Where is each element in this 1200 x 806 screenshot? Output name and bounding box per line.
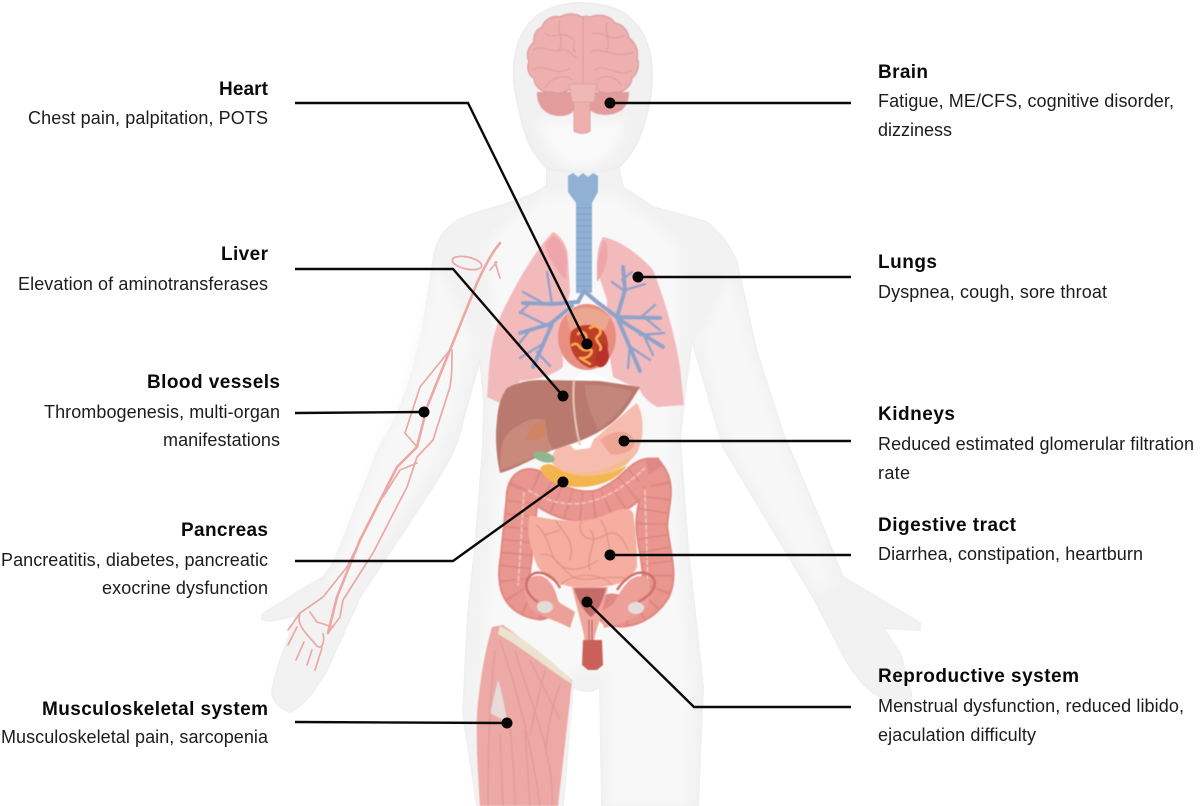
label: blood vessels: Blood vessels bbox=[147, 372, 280, 393]
label: liver: Elevation of aminotransferases bbox=[18, 274, 268, 294]
label: pancreas: exocrine dysfunction bbox=[102, 578, 268, 598]
label: lungs: Lungs bbox=[878, 252, 937, 273]
label: reproductive system bbox=[878, 666, 1184, 745]
label: kidneys: rate bbox=[878, 463, 910, 483]
label: heart bbox=[28, 79, 269, 128]
label: brain: Brain bbox=[878, 62, 928, 83]
label: digestive tract bbox=[878, 515, 1143, 564]
label: kidneys: Reduced estimated glomerular filtration bbox=[878, 434, 1194, 454]
leader line: liver bbox=[295, 269, 568, 402]
liver bbox=[496, 380, 640, 473]
gallbladder bbox=[532, 449, 556, 465]
label: lungs: Dyspnea, cough, sore throat bbox=[878, 282, 1107, 302]
stomach bbox=[550, 403, 643, 477]
blood vessels of the arm bbox=[288, 243, 500, 670]
label: pancreas bbox=[1, 520, 268, 598]
small intestine bbox=[528, 509, 637, 588]
label: blood vessels: Thrombogenesis, multi-organ bbox=[44, 402, 280, 422]
label: brain: dizziness bbox=[878, 120, 952, 140]
label: liver: Liver bbox=[221, 244, 269, 265]
label: brain bbox=[878, 62, 1174, 140]
label: digestive tract: Digestive tract bbox=[878, 515, 1017, 536]
leader line: pancreas bbox=[295, 476, 568, 561]
leader line: kidneys bbox=[618, 436, 851, 446]
label: pancreas: Pancreas bbox=[181, 520, 268, 541]
leader line: digestive tract bbox=[604, 550, 851, 560]
trachea bbox=[568, 173, 598, 293]
label: reproductive system: Menstrual dysfunction, reduced libido, bbox=[878, 696, 1184, 716]
leader line: musculoskeletal system bbox=[295, 718, 512, 728]
label: musculoskeletal system: Musculoskeletal pain, sarcopenia bbox=[1, 727, 269, 747]
leader line: lungs bbox=[632, 272, 851, 282]
label: liver bbox=[18, 244, 269, 294]
leader line: brain bbox=[604, 98, 851, 108]
large intestine bbox=[515, 468, 658, 611]
label: kidneys bbox=[878, 404, 1194, 483]
label: reproductive system: Reproductive system bbox=[878, 666, 1079, 687]
leader line: blood vessels bbox=[295, 406, 430, 418]
label: heart: Heart bbox=[219, 79, 269, 100]
label: pancreas: Pancreatitis, diabetes, pancreatic bbox=[1, 550, 268, 570]
label: brain: Fatigue, ME/CFS, cognitive disorder, bbox=[878, 91, 1174, 111]
leader line: reproductive system bbox=[582, 596, 851, 707]
label: lungs bbox=[878, 252, 1107, 302]
label: reproductive system: ejaculation difficulty bbox=[878, 725, 1036, 745]
label: musculoskeletal system bbox=[1, 699, 269, 747]
label: heart: Chest pain, palpitation, POTS bbox=[28, 108, 268, 128]
thigh muscle bbox=[477, 625, 572, 806]
leader line: heart bbox=[295, 103, 592, 350]
label: kidneys: Kidneys bbox=[878, 404, 955, 425]
label: blood vessels bbox=[44, 372, 280, 450]
heart bbox=[558, 304, 616, 382]
label: digestive tract: Diarrhea, constipation, heartburn bbox=[878, 544, 1143, 564]
bronchi bbox=[518, 267, 664, 371]
brain bbox=[527, 14, 638, 133]
body silhouette bbox=[262, 3, 920, 806]
lungs bbox=[487, 232, 684, 407]
reproductive system bbox=[525, 573, 655, 670]
label: blood vessels: manifestations bbox=[163, 430, 280, 450]
label: musculoskeletal system: Musculoskeletal system bbox=[42, 699, 268, 720]
pancreas bbox=[540, 455, 632, 487]
